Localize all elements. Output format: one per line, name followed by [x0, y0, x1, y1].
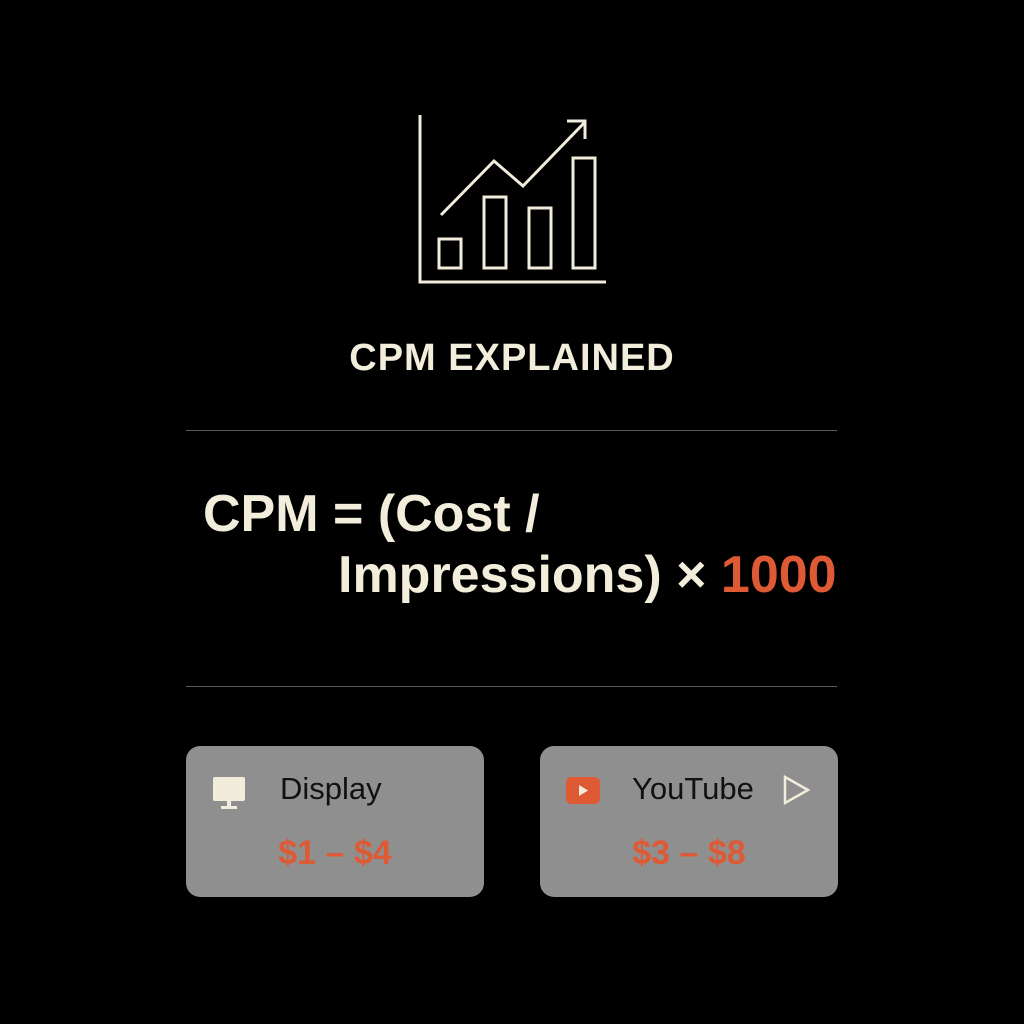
- title: CPM EXPLAINED: [349, 337, 675, 379]
- formula: CPM = (Cost /: [203, 485, 540, 543]
- card: YouTube: YouTube: [632, 771, 754, 806]
- icon: monitor: [213, 777, 245, 809]
- card: YouTube: $3 – $8: [632, 834, 746, 872]
- icon: play triangle: [784, 775, 810, 805]
- card: YouTube: [540, 746, 838, 897]
- card: Display: Display: [280, 771, 382, 806]
- icon: youtube logo: [566, 777, 600, 804]
- card: Display: $1 – $4: [278, 834, 392, 872]
- formula: Impressions) × 1000: [338, 546, 837, 604]
- formula: [203, 485, 837, 604]
- card: Display: [186, 746, 484, 897]
- icon: bar chart with rising arrow: [418, 115, 606, 284]
